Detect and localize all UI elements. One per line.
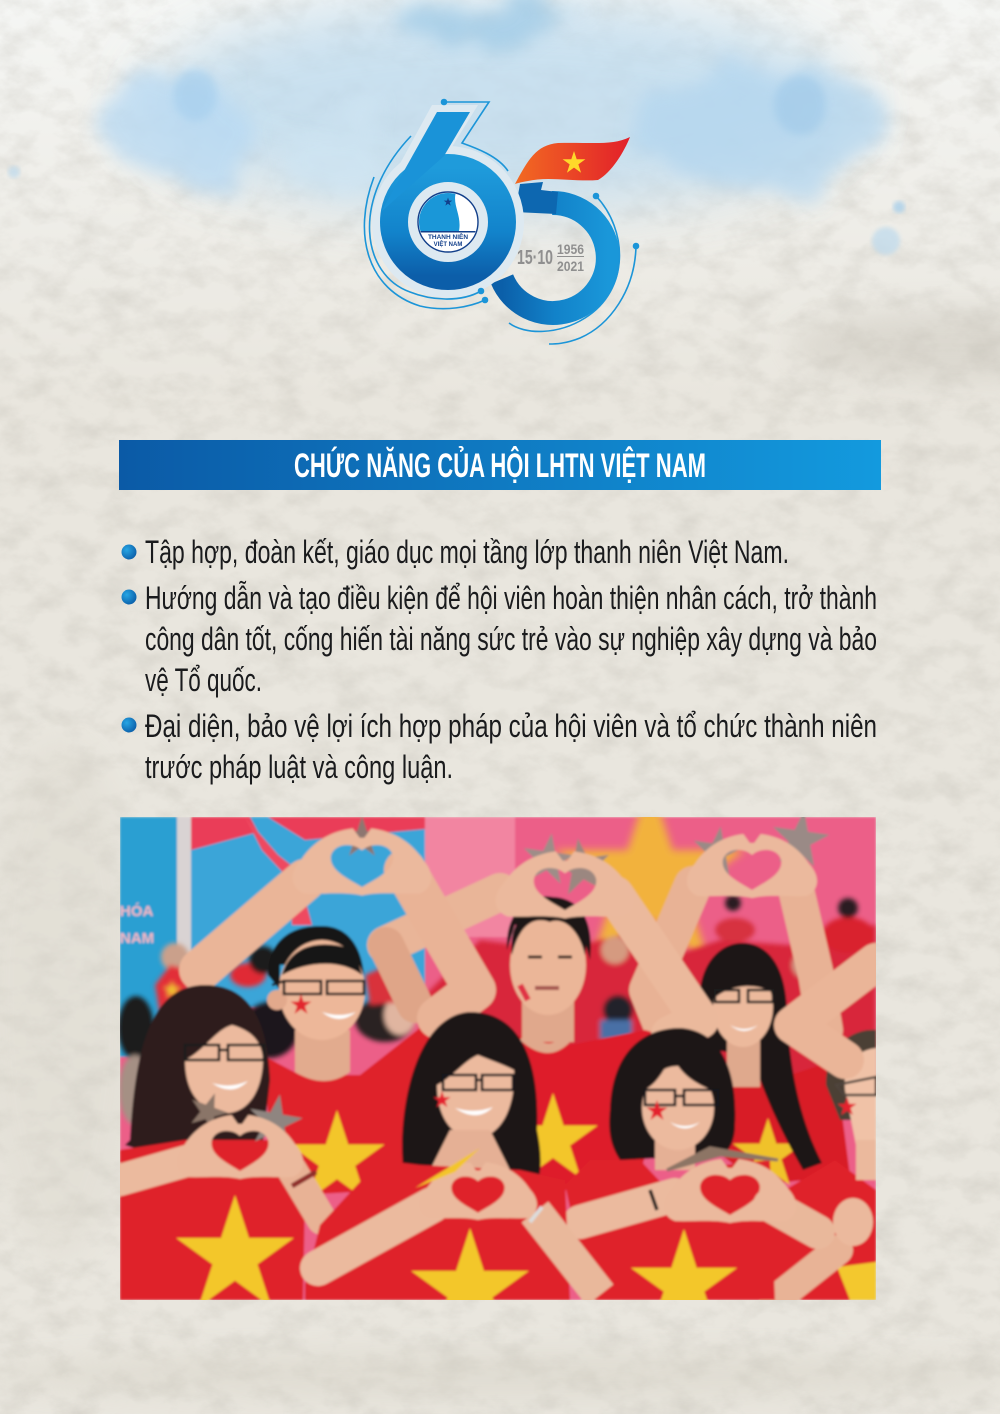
- youth union badge: [418, 192, 478, 252]
- bullet 2: [122, 579, 877, 698]
- thin orbit lines: [364, 100, 638, 344]
- blurred crowd: [118, 895, 876, 1125]
- bullet list: [122, 534, 877, 785]
- photo backdrop: HÓA: [120, 902, 154, 920]
- man left with glasses: [200, 828, 475, 1200]
- date text: [517, 242, 584, 274]
- bullet 2: vệ Tổ quốc.: [145, 662, 262, 698]
- woman front centre: [305, 1012, 600, 1340]
- youth union badge: VIỆT NAM: [434, 240, 462, 248]
- flag with star: [515, 137, 630, 184]
- woman front left: [120, 985, 322, 1307]
- man centre: [386, 851, 700, 1190]
- date text: 1956: [557, 242, 584, 257]
- youth union badge: THANH NIÊN: [428, 232, 468, 241]
- photo backdrop: [120, 781, 876, 1300]
- digit 6: [372, 105, 524, 298]
- date text: 15·10: [517, 247, 553, 269]
- blue watercolour wash: [8, 0, 905, 255]
- logo: 65 years: [364, 100, 638, 344]
- photo: youth making heart hands: [120, 817, 876, 1300]
- back paper stars: [348, 817, 830, 894]
- heading bar: [119, 440, 881, 490]
- date text: 2021: [557, 259, 584, 274]
- woman back right: [648, 834, 850, 1185]
- woman front right centre: [565, 1028, 818, 1330]
- digit 5: [502, 182, 608, 313]
- photo backdrop: NAM: [120, 930, 154, 947]
- bullet 3: [122, 708, 877, 785]
- heading bar: CHỨC NĂNG CỦA HỘI LHTN VIỆT NAM: [294, 446, 706, 485]
- bullet 3: trước pháp luật và công luận.: [145, 749, 453, 785]
- woman front right edge: [750, 962, 876, 1300]
